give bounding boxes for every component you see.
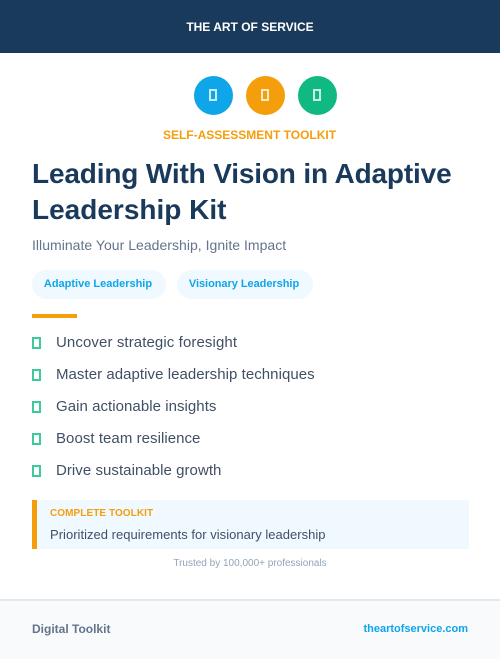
bullet icon 3 <box>32 401 40 413</box>
title <box>32 158 451 225</box>
bullet icon 4 <box>32 433 40 445</box>
title: Leading With Vision in Adaptive <box>32 158 451 189</box>
tag: Visionary Leadership <box>177 270 313 299</box>
icon: green circle <box>298 76 337 115</box>
bullet text 1: Uncover strategic foresight <box>56 334 237 351</box>
bullet icon 2 <box>32 369 40 381</box>
trust line: Trusted by 100,000+ professionals <box>173 558 327 569</box>
tag: Visionary Leadership: Visionary Leadership <box>189 278 299 290</box>
title: Leadership Kit <box>32 194 226 225</box>
icon: blue circle <box>194 76 233 115</box>
tag: Adaptive Leadership: Adaptive Leadership <box>44 278 152 290</box>
callout text: Prioritized requirements for visionary leadership <box>50 527 326 542</box>
bullet text 4: Boost team resilience <box>56 430 200 447</box>
tag: Adaptive Leadership <box>32 270 166 299</box>
footer left label: Digital Toolkit <box>32 622 110 636</box>
accent divider <box>32 314 77 318</box>
bullet text 3: Gain actionable insights <box>56 398 216 415</box>
icon: orange circle <box>246 76 285 115</box>
bullet icon 5 <box>32 465 40 477</box>
footer url: theartofservice.com <box>363 623 468 635</box>
header bar <box>0 0 500 53</box>
eyebrow label: SELF-ASSESSMENT TOOLKIT <box>163 128 336 142</box>
bullet icon 1 <box>32 337 40 349</box>
callout label: COMPLETE TOOLKIT <box>50 508 153 519</box>
bullet text 2: Master adaptive leadership techniques <box>56 366 315 383</box>
bullet text 5: Drive sustainable growth <box>56 462 221 479</box>
footer <box>0 599 500 659</box>
bullet list <box>32 334 315 479</box>
callout panel <box>32 500 469 549</box>
subtitle: Illuminate Your Leadership, Ignite Impact <box>32 237 286 253</box>
header bar: THE ART OF SERVICE <box>186 20 314 34</box>
